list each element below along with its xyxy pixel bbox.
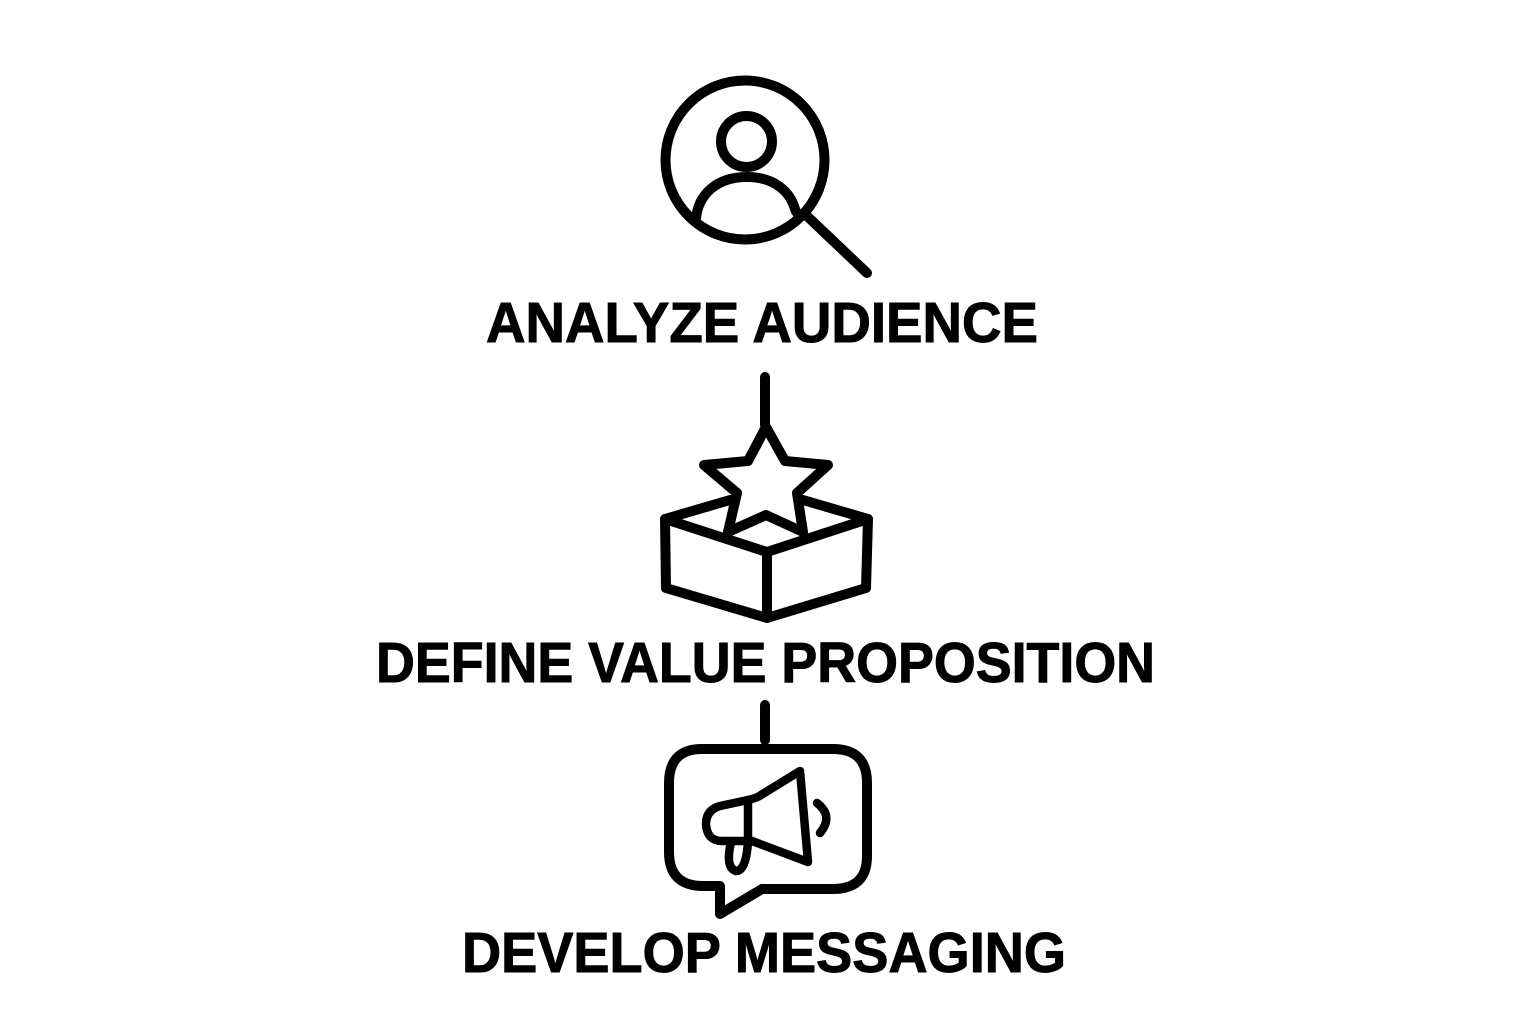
heading: analyze audience: ANALYZE AUDIENCE (486, 291, 1038, 355)
icon: star rising from box (665, 427, 868, 618)
arrow: connector one (760, 377, 770, 425)
heading: define value proposition: DEFINE VALUE PROPOSITION (376, 631, 1155, 695)
icon: megaphone in speech bubble (669, 749, 867, 914)
icon: magnifying glass over person (666, 80, 867, 273)
heading: develop messaging: DEVELOP MESSAGING (462, 921, 1066, 985)
arrow: connector two (760, 705, 770, 740)
